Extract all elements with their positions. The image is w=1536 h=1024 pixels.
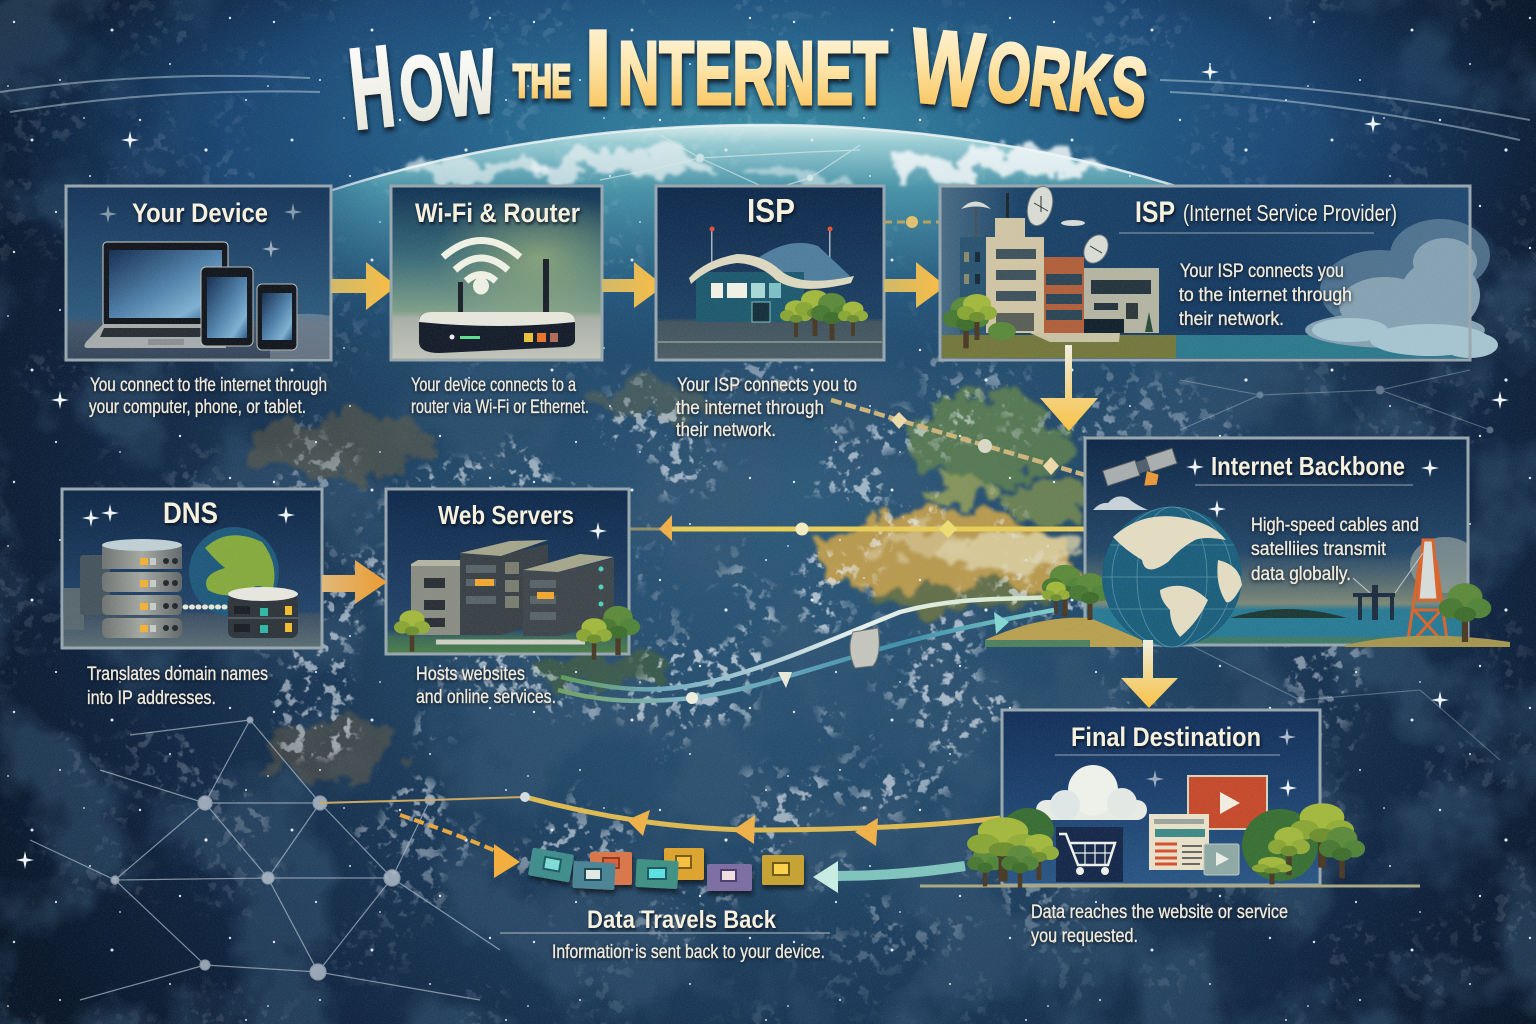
clouds (1305, 219, 1498, 358)
heading: your device: Your Device (132, 198, 268, 228)
sparkle (82, 504, 295, 527)
title: W (906, 7, 988, 130)
description: their network. (1179, 309, 1284, 330)
small sparkles (1146, 728, 1297, 797)
icon: phone (257, 284, 297, 350)
heading: web servers: Web Servers (438, 500, 574, 530)
title: I (584, 7, 612, 128)
small clouds and sparkles (1093, 458, 1439, 518)
caption: web servers: and online services. (416, 687, 556, 708)
route: fibre cable from web servers to backbone (558, 597, 1054, 704)
icon: trees and ground (920, 803, 1420, 888)
title: OW (395, 31, 501, 141)
title: ORKS (982, 23, 1152, 136)
icon: server buildings (411, 540, 614, 642)
icon: tablet (201, 267, 253, 346)
icon: bridge (1353, 553, 1423, 620)
arrow: backbone down to final destination (1121, 640, 1178, 708)
icon: office buildings (943, 193, 1159, 348)
sky clouds and far hills (1135, 537, 1466, 644)
description: Your ISP connects you (1180, 261, 1344, 282)
icon: satellite dishes (961, 184, 1113, 267)
title (344, 7, 1152, 154)
icon: satellite (1103, 448, 1181, 499)
caption: dns: Translates domain names (87, 664, 268, 685)
heading: final destination: Final Destination (1071, 722, 1261, 752)
title: THE (513, 55, 571, 107)
caption: isp (676, 375, 857, 441)
network constellation, lower left (30, 717, 500, 1000)
caption: data travels back: Information is sent back to your device. (552, 942, 825, 963)
caption: web servers (416, 664, 556, 708)
caption: data travels back: Data Travels Back (587, 906, 776, 934)
description (1179, 261, 1352, 330)
arrow: dns to web servers (322, 560, 387, 604)
icon: small teal server (228, 587, 298, 638)
description (1251, 515, 1419, 585)
sparkle (589, 522, 607, 540)
caption: dns (87, 664, 268, 709)
icon: trees (780, 290, 868, 340)
arrow: final destination to data packets (813, 861, 965, 893)
icon: small video (1204, 844, 1239, 875)
icon: trees (394, 606, 640, 660)
caption: your device (89, 375, 327, 418)
caption: final destination: you requested. (1031, 926, 1138, 947)
route: dashed line from ISP to backbone (831, 400, 1085, 475)
arrow: isp to provider (884, 262, 946, 308)
route: backbone to web servers (630, 515, 1085, 541)
icon: dns server stack (102, 539, 182, 638)
caption: isp: the internet through (676, 398, 824, 419)
heading: isp: ISP (747, 192, 795, 229)
panel: your device (66, 186, 331, 360)
icon: radio tower (1408, 540, 1447, 640)
title: H (344, 22, 400, 154)
icon: isp building (689, 226, 854, 322)
title: NTERNET (618, 24, 888, 124)
heading: dns: DNS (163, 497, 218, 530)
caption: wi-fi and router: Your device connects to a (411, 375, 576, 396)
icon: web page (1149, 814, 1209, 870)
icon: cloud (1036, 765, 1147, 820)
route: return path from final destination (320, 792, 1000, 878)
panel: isp (656, 186, 884, 360)
caption: dns: into IP addresses. (87, 688, 216, 709)
caption: isp: their network. (676, 420, 776, 441)
panel: wi-fi and router (391, 186, 602, 360)
arrow: device to router (331, 262, 397, 310)
icon: background disks (64, 555, 110, 630)
panel: dns (62, 489, 322, 648)
panel: final destination (920, 710, 1420, 888)
heading: wi-fi and router: Wi-Fi & Router (415, 198, 580, 228)
heading: isp internet service provider: ISP (1135, 196, 1175, 229)
description: to the internet through (1179, 285, 1352, 306)
icon: shore trees (1345, 583, 1510, 647)
icon: sand island and trees (985, 565, 1142, 647)
heading: isp internet service provider: (Internet Service Provider) (1183, 200, 1397, 226)
heading: isp internet service provider (1119, 196, 1397, 233)
caption: final destination (1031, 902, 1288, 947)
network lines on the upper right sky (1180, 370, 1500, 760)
heading: internet backbone: Internet Backbone (1211, 451, 1405, 481)
panel: web servers (386, 489, 640, 660)
caption: wi-fi and router: router via Wi-Fi or Ethernet. (411, 397, 589, 418)
caption: wi-fi and router (411, 375, 589, 418)
caption: final destination: Data reaches the website or service (1031, 902, 1288, 923)
description: data globally. (1251, 564, 1351, 585)
arrow: router to isp (602, 262, 664, 308)
icon: wi-fi waves (443, 240, 520, 294)
arrow: provider down to backbone (1040, 345, 1098, 431)
icon: router (419, 259, 575, 353)
icon: globe (1102, 507, 1242, 647)
icon: shopping cart (1056, 827, 1123, 882)
beads between servers (185, 604, 228, 610)
caption: your device: You connect to the internet through (90, 375, 327, 396)
description: satelliies transmit (1251, 539, 1387, 560)
description: High-speed cables and (1251, 515, 1419, 536)
icon: laptop (84, 242, 228, 348)
panel: internet backbone (985, 438, 1510, 647)
panel: isp internet service provider (940, 184, 1498, 360)
icon: globe behind servers (189, 527, 279, 617)
data packets (528, 848, 804, 891)
caption: data travels back (500, 906, 830, 963)
ground and water strip (942, 335, 1468, 358)
caption: web servers: Hosts websites (416, 664, 525, 685)
caption: isp: Your ISP connects you to (677, 375, 857, 396)
icon: video player (1188, 776, 1267, 829)
connector dot between isp panels (884, 216, 940, 228)
caption: your device: your computer, phone, or tablet. (89, 397, 306, 418)
